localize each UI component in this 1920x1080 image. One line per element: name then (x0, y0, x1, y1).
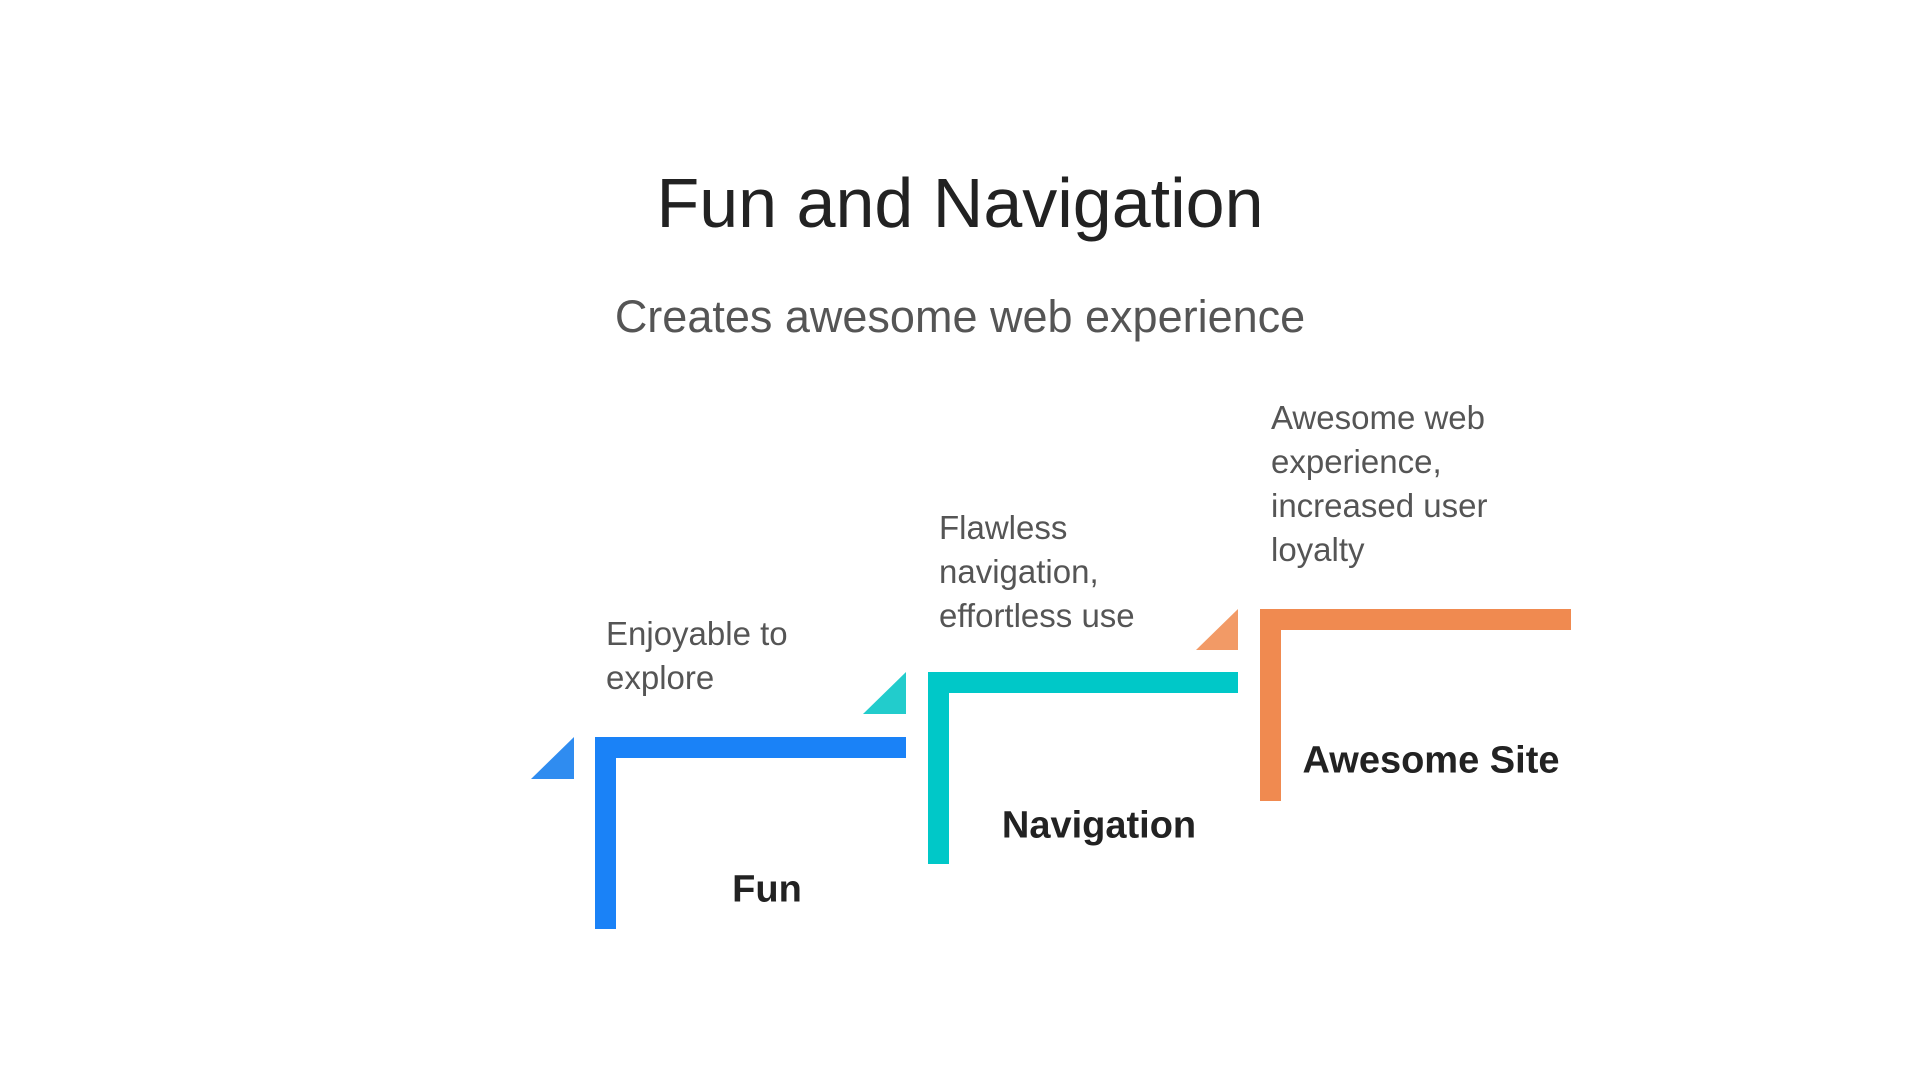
text: awesome site: increased user (1271, 487, 1487, 524)
text: awesome site: experience, (1271, 443, 1442, 480)
text: fun: explore (606, 659, 714, 696)
label: fun: Fun (732, 868, 802, 910)
text: navigation (939, 509, 1135, 634)
text: awesome site: loyalty (1271, 531, 1365, 568)
subtitle: Creates awesome web experience (615, 291, 1305, 342)
step: awesome site (1196, 609, 1571, 801)
text: navigation: navigation, (939, 553, 1099, 590)
step: navigation (863, 672, 1238, 864)
text: awesome site (1271, 399, 1487, 568)
text: awesome site: Awesome web (1271, 399, 1485, 436)
text: navigation: Flawless (939, 509, 1067, 546)
label: awesome site: Awesome Site (1303, 740, 1559, 782)
step: fun (531, 737, 906, 929)
text: navigation: effortless use (939, 597, 1135, 634)
title: Fun and Navigation (656, 164, 1264, 242)
label: navigation: Navigation (1002, 804, 1196, 846)
text: fun: Enjoyable to (606, 615, 788, 652)
text: fun (606, 615, 788, 696)
